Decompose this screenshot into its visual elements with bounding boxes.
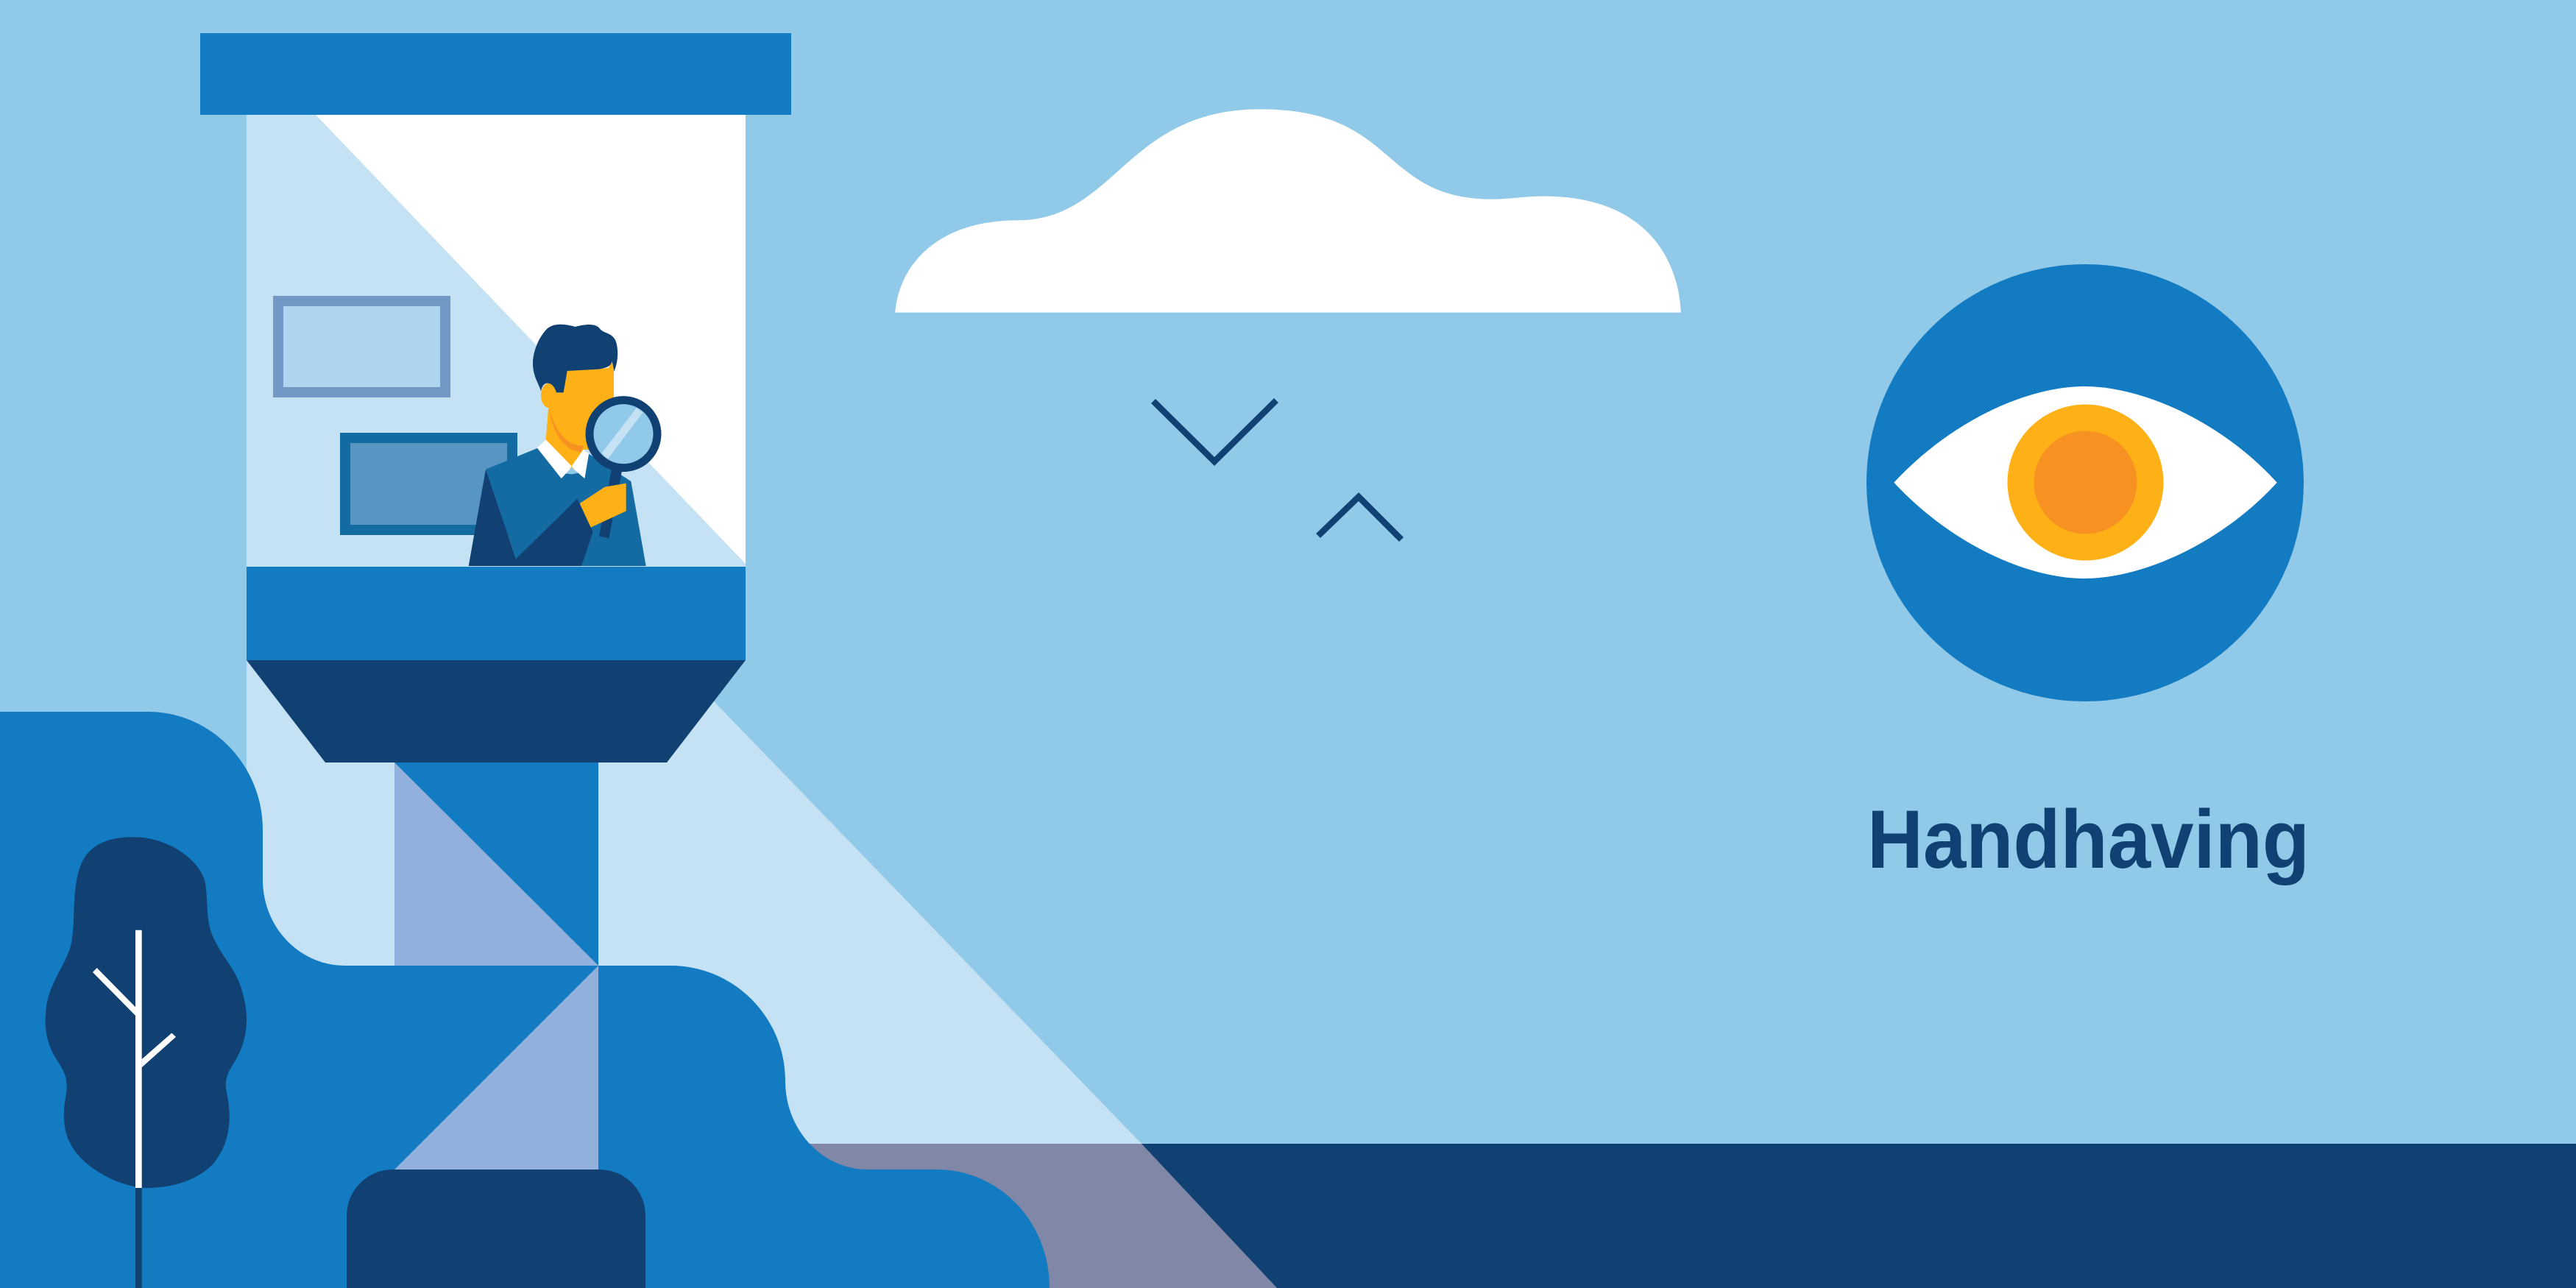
- chin shadow: [549, 407, 584, 452]
- light beam: [247, 115, 1142, 1144]
- eye badge: [1866, 264, 2304, 701]
- water band: [1142, 1144, 2576, 1288]
- figure: man with magnifying glass: [469, 325, 657, 566]
- column upper light triangle: [394, 762, 598, 966]
- neck tip: [569, 466, 574, 470]
- left branch: [93, 968, 135, 1016]
- tower window wall: [247, 115, 746, 567]
- collar: [537, 439, 589, 478]
- column upper blue triangle: [394, 762, 598, 966]
- heading: Handhaving: [1867, 793, 2310, 885]
- arm: [469, 470, 593, 566]
- balcony: [247, 567, 746, 660]
- picture frame: lower: [345, 438, 512, 530]
- bird: large: [1153, 400, 1276, 461]
- tower base: [347, 1170, 645, 1288]
- balcony underside: [247, 660, 746, 762]
- hills: [0, 712, 1050, 1288]
- cloud: [895, 109, 1681, 313]
- icon: eye: [1866, 264, 2304, 701]
- pupil: [2034, 431, 2137, 534]
- column lower light triangle: [394, 966, 598, 1170]
- iris: [2008, 405, 2164, 561]
- tree trunk upper: [135, 930, 142, 1188]
- bird: small: [1318, 497, 1401, 539]
- tree trunk lower: [135, 1188, 142, 1288]
- tree crown: [46, 837, 247, 1188]
- magnifier lens: [590, 400, 657, 468]
- hand: [580, 484, 626, 528]
- tower column: [394, 762, 598, 966]
- hair: [533, 325, 618, 392]
- sweater: [486, 448, 646, 566]
- face and neck: [546, 361, 614, 467]
- picture frame: upper: [278, 301, 445, 392]
- right branch: [142, 1033, 176, 1067]
- tree: [46, 837, 247, 1288]
- lens glare: [601, 408, 643, 459]
- water under light beam: [736, 1144, 1277, 1288]
- tower top cap: [200, 33, 791, 115]
- ear: [541, 383, 556, 408]
- magnifier handle: [599, 469, 622, 539]
- eye white: [1894, 386, 2277, 578]
- shirt: [565, 467, 578, 474]
